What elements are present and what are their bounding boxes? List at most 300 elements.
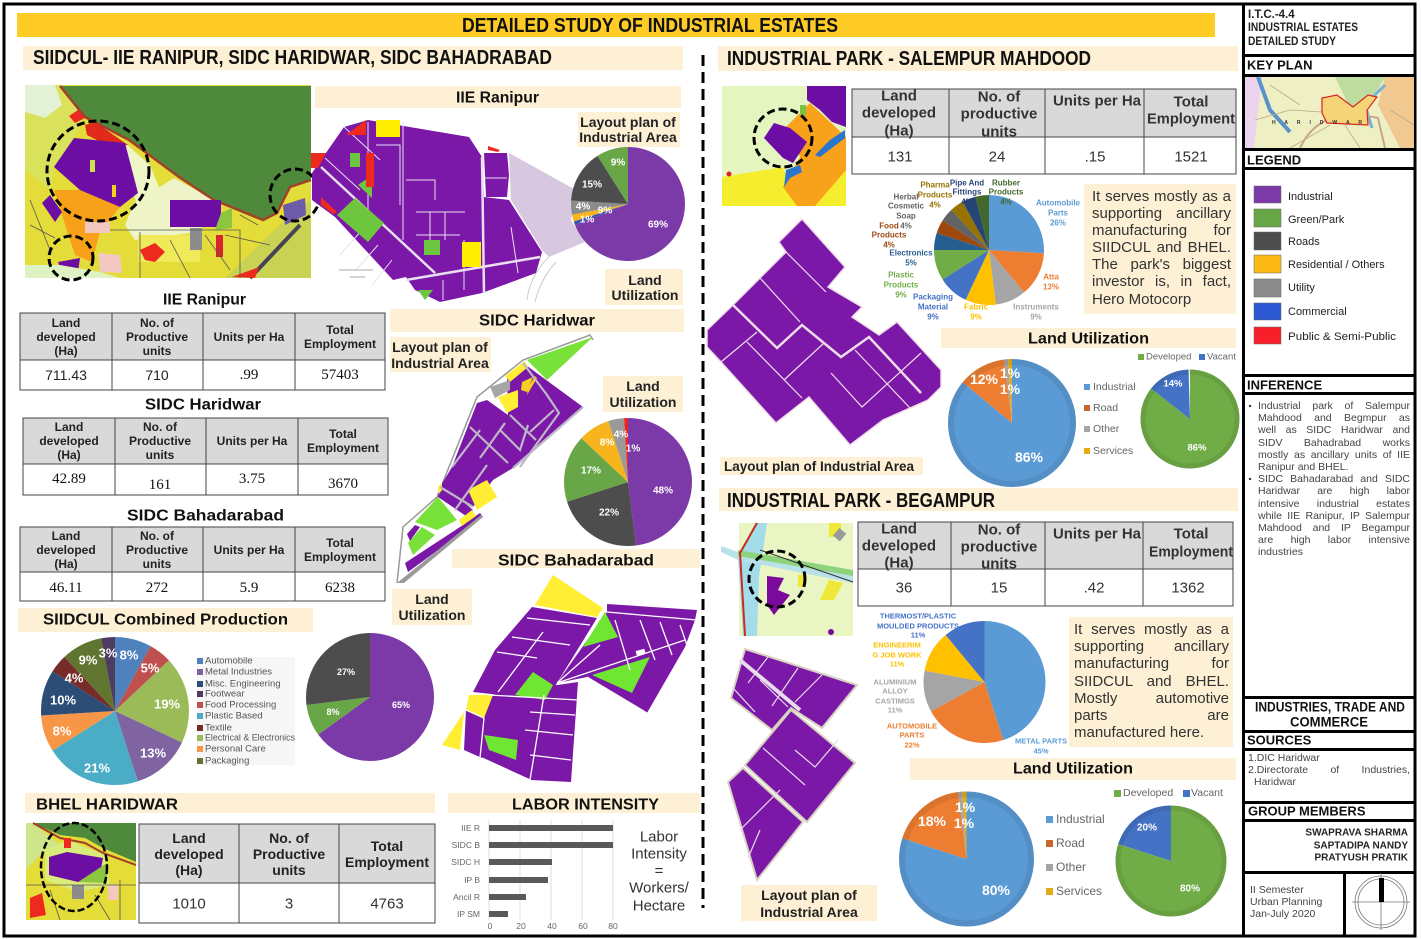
table: Begampur: 36 <box>896 580 912 596</box>
table: SIDC Bahadarabad: developed <box>36 543 96 557</box>
table: Salempur: units <box>981 124 1017 140</box>
table: SIDC Haridwar: 161 <box>149 477 171 493</box>
text: labor intensity formula: Labor <box>640 828 678 846</box>
table: BHEL Haridwar: developed <box>154 846 224 862</box>
text block: inference bullets <box>1258 400 1410 558</box>
map: Salempur <box>722 86 846 206</box>
pie: SIIDCUL combined production: 8% <box>53 724 72 738</box>
pie: Begampur production: ALLOY <box>882 686 908 696</box>
pie: SIIDCUL combined production: 8% <box>120 648 139 662</box>
pie: Salempur production: 9% <box>895 290 907 300</box>
legend: land use: Public & Semi-Public <box>1288 331 1397 343</box>
table: BHEL Haridwar: Land <box>172 830 206 846</box>
map: key plan <box>1245 77 1414 148</box>
legend: combined production: Metal Industries <box>205 666 272 678</box>
pie: Salempur production: Pipe And <box>950 178 984 188</box>
table: BHEL Haridwar: units <box>272 862 306 878</box>
table: IIE Ranipur: units <box>143 344 172 358</box>
text block: Begampur description: It serves mostly as a <box>1074 621 1229 638</box>
table: Salempur: (Ha) <box>884 122 914 140</box>
table: SIDC Bahadarabad <box>20 527 385 601</box>
pie: SIIDCUL combined production: 4% <box>65 670 84 686</box>
table: IIE Ranipur: 711.43 <box>45 367 87 383</box>
pie: Salempur production: Soap <box>896 212 916 220</box>
table: Begampur: developed <box>862 538 936 554</box>
pie: Begampur production <box>872 612 1067 756</box>
pie: Salempur land utilization: 86% <box>1015 449 1044 465</box>
bar chart: labor intensity: 20 <box>516 921 526 931</box>
pie: SIIDCUL combined production <box>50 646 180 776</box>
text block: Begampur description <box>1074 621 1229 741</box>
text block: Begampur description: Mostly automotive <box>1074 690 1229 707</box>
panel: BHEL Haridwar heading: BHEL HARIDWAR <box>36 796 178 814</box>
label: layout plan IIE Ranipur <box>578 112 680 147</box>
table: BHEL Haridwar: 1010 <box>172 896 206 912</box>
label: layout plan SIDC Haridwar: Industrial Area <box>391 355 489 371</box>
table: SIDC Bahadarabad: 5.9 <box>240 580 258 596</box>
pie: Begampur land utilization: 1% <box>955 799 976 815</box>
bar chart: labor intensity: SIDC B <box>452 840 480 850</box>
pie: SIIDCUL combined production: 3% <box>99 646 118 660</box>
legend: Begampur developed vacant: Developed <box>1123 787 1173 799</box>
heading: IIE Ranipur table: IIE Ranipur <box>163 292 246 308</box>
table: Salempur: No. of <box>978 88 1021 106</box>
table: SIDC Bahadarabad: Employment <box>304 550 376 564</box>
legend: Salempur developed vacant <box>1138 352 1236 362</box>
pie: SIDC Haridwar land utilization: 1% <box>626 444 640 454</box>
panel: SIIDCUL heading: SIIDCUL- IIE RANIPUR, SIDC HARIDWAR, SIDC BAHADRABAD <box>33 47 552 69</box>
pie: Begampur production: 11% <box>911 630 926 640</box>
pie: Begampur production: ENGINEERIM <box>873 640 921 650</box>
plan: SIDC Haridwar layout <box>397 335 593 583</box>
table: Salempur: Land <box>881 88 917 104</box>
panel: Labor intensity heading: LABOR INTENSITY <box>512 796 659 814</box>
pie: Salempur production: Products <box>989 188 1024 196</box>
table: BHEL Haridwar: (Ha) <box>175 862 203 878</box>
pie: Begampur production: 22% <box>904 740 920 750</box>
table: BHEL Haridwar: Total <box>371 838 403 854</box>
legend: Salempur land utilization <box>1084 381 1136 457</box>
table: SIDC Bahadarabad: units <box>143 557 172 571</box>
text block: Begampur description: SIIDCUL and BHEL. <box>1074 673 1229 690</box>
text block: Begampur description: manufactured here. <box>1074 724 1204 741</box>
label: land utilization IIE Ranipur <box>605 269 683 305</box>
table: SIDC Haridwar: (Ha) <box>57 448 81 462</box>
table: Begampur: Units per Ha <box>1053 526 1142 542</box>
table: Salempur: 24 <box>989 148 1005 166</box>
pie: Salempur production: 4% <box>929 200 941 210</box>
text block: Salempur description: The park's biggest <box>1092 256 1231 273</box>
bar chart: labor intensity: IP B <box>464 875 480 885</box>
pie: SIIDCUL combined production: 9% <box>79 652 98 668</box>
pie: Salempur production: Packaging <box>913 292 953 302</box>
text block: inference bullets: SIDC Bahadarabad and SIDC <box>1258 473 1410 485</box>
table: SIDC Haridwar <box>23 418 388 495</box>
table: SIDC Bahadarabad: 46.11 <box>49 580 83 596</box>
text block: sources list <box>1248 752 1410 788</box>
text block: Salempur description: investor is, in fact, <box>1092 273 1231 290</box>
table: SIDC Bahadarabad: (Ha) <box>54 557 78 571</box>
heading: SIDC Bahadarabad table: SIDC Bahadarabad <box>127 508 284 524</box>
label: land utilization SIDC Haridwar <box>603 376 683 412</box>
pie: Salempur production: 9% <box>970 312 982 322</box>
pie: Salempur developed vs vacant: 14% <box>1163 378 1183 390</box>
table: SIDC Bahadarabad: Total <box>326 536 354 550</box>
table: SIDC Haridwar: 3.75 <box>239 471 265 487</box>
table: BHEL Haridwar: 4763 <box>370 896 404 912</box>
title banner: DETAILED STUDY OF INDUSTRIAL ESTATES <box>462 15 838 37</box>
table: BHEL Haridwar: Employment <box>345 854 429 870</box>
table: Salempur: Employment <box>1147 110 1235 128</box>
table: IIE Ranipur: Land <box>52 316 80 330</box>
sidebar: group member names: SWAPRAVA SHARMA <box>1305 828 1408 838</box>
legend: combined production: Textile <box>205 722 232 734</box>
pie: Begampur production: ALUMINIUM <box>874 678 916 686</box>
table: Begampur: (Ha) <box>884 554 914 572</box>
pie: Begampur production: G JOB WORK <box>872 650 922 660</box>
table: Salempur: productive <box>961 106 1037 122</box>
sidebar: sources heading: SOURCES <box>1247 732 1312 748</box>
text: labor intensity formula: Workers/ <box>629 880 690 896</box>
label: Begampur layout plan: Layout plan of <box>761 887 857 903</box>
text block: Begampur description: parts are <box>1074 707 1229 724</box>
text block: inference bullets: industries <box>1258 546 1303 558</box>
text block: Salempur description: Hero Motocorp <box>1092 291 1191 308</box>
pie: Salempur production: Plastic <box>888 270 914 280</box>
panel: Begampur land utilization heading: Land Utilization <box>1013 760 1133 778</box>
pie: Begampur land utilization: 80% <box>982 882 1011 898</box>
pie: Begampur developed vs vacant: 80% <box>1180 884 1200 894</box>
plan: SIDC Bahadarabad layout <box>442 575 697 782</box>
bar chart: labor intensity: 40 <box>547 921 557 931</box>
legend: Begampur land utilization: Industrial <box>1056 812 1105 826</box>
pie: Begampur production: CASTIMGS <box>875 696 915 706</box>
panel: SIDC Haridwar heading: SIDC Haridwar <box>479 312 595 330</box>
table: SIDC Haridwar: Land <box>55 420 83 434</box>
bar chart: labor intensity: 0 <box>488 921 493 931</box>
legend: Begampur developed vacant: Vacant <box>1191 787 1223 799</box>
pie: Salempur land utilization: 1% <box>1000 365 1021 381</box>
text block: inference bullets: Mahdood and IP Begampur <box>1258 522 1410 534</box>
pie: Begampur production: 11% <box>890 660 905 668</box>
pie: SIIDCUL combined production: 21% <box>84 760 110 776</box>
table: Begampur: .42 <box>1084 580 1104 596</box>
panel: SIDC Bahadarabad heading: SIDC Bahadarabad <box>498 552 654 570</box>
map: Begampur <box>721 523 853 636</box>
pie: IIE Ranipur land utilization: 69% <box>648 220 668 230</box>
table: Begampur: Total <box>1174 526 1208 542</box>
pie: IIE Ranipur land utilization: 9% <box>611 158 625 168</box>
map: regional land use with estates circled <box>25 85 320 280</box>
pie: SIIDCUL combined production: 5% <box>141 660 160 676</box>
label: layout plan SIDC Haridwar: Layout plan of <box>392 339 488 355</box>
legend: combined production: Food Processing <box>205 700 276 710</box>
pie: Begampur production: 11% <box>888 706 903 714</box>
legend: land use <box>1254 186 1397 344</box>
pie: SIDC Haridwar land utilization: 22% <box>599 508 619 518</box>
sidebar: sheet title: DETAILED STUDY <box>1248 36 1336 48</box>
pie: Salempur production: 13% <box>1043 282 1059 292</box>
map: BHEL Haridwar <box>26 823 136 920</box>
table: Salempur <box>852 88 1236 174</box>
table: Salempur: .15 <box>1085 148 1105 166</box>
panel: IIE Ranipur heading: IIE Ranipur <box>456 90 539 106</box>
icon: north arrow <box>1352 873 1410 930</box>
legend: Begampur land utilization: Road <box>1056 836 1085 850</box>
label: layout plan IIE Ranipur: Industrial Area <box>579 129 677 145</box>
bar chart: labor intensity: 80 <box>608 921 618 931</box>
sidebar: group member names: PRATYUSH PRATIK <box>1314 852 1409 864</box>
legend: Begampur developed vacant <box>1114 787 1223 799</box>
sidebar: semester note: Jan-July 2020 <box>1250 908 1316 920</box>
table: BHEL Haridwar: 3 <box>285 896 293 912</box>
bar chart: labor intensity: Ancil R <box>453 892 480 902</box>
text block: inference bullets: Mahdood and Begmpur as <box>1258 412 1410 424</box>
title banner <box>17 13 1215 37</box>
legend: land use: Residential / Others <box>1288 259 1385 271</box>
table: Salempur: 131 <box>887 148 913 166</box>
text block: Salempur description: manufacturing for <box>1092 222 1231 239</box>
text block: inference bullets: while IIE Ranipur, IP Salempur <box>1258 510 1410 522</box>
pie: SIDC Bahadarabad land utilization: 27% <box>337 667 355 677</box>
pie: Begampur production: 45% <box>1033 746 1049 756</box>
table: Begampur: units <box>981 556 1017 572</box>
legend: combined production: Personal Care <box>205 744 266 754</box>
legend: Salempur developed vacant: Vacant <box>1207 352 1236 362</box>
panel: Begampur heading <box>719 488 1238 512</box>
table: SIDC Haridwar: units <box>146 448 175 462</box>
pie: Begampur production: THERMOST/PLASTIC <box>880 612 957 620</box>
label: Salempur layout plan: Layout plan of Industrial Area <box>724 458 914 474</box>
table: IIE Ranipur: Productive <box>126 330 188 344</box>
legend: land use: Green/Park <box>1288 214 1345 226</box>
pie: SIIDCUL combined production: 13% <box>140 746 166 760</box>
bar chart: labor intensity: IP SM <box>457 909 480 919</box>
pie: Salempur land utilization <box>951 362 1073 484</box>
pie: Salempur developed vs vacant <box>1143 372 1237 466</box>
legend: combined production: Electrical & Electronics <box>205 732 295 744</box>
pie: Salempur production: 9% <box>927 312 939 322</box>
pie: Salempur production: Electronics <box>889 248 933 258</box>
legend: combined production: Plastic Based <box>205 710 263 722</box>
pie: IIE Ranipur land utilization <box>576 158 668 232</box>
label: land utilization SIDC Bahadarabad: Utilization <box>399 607 465 623</box>
pie: Salempur production: Parts <box>1048 208 1069 218</box>
pie: Salempur production: Automobile <box>1036 198 1081 208</box>
sidebar: group member names <box>1305 828 1409 864</box>
text block: Salempur description: supporting ancillary <box>1092 205 1231 222</box>
pie: Begampur production: METAL PARTS <box>1015 736 1067 746</box>
table: SIDC Haridwar: Total <box>329 427 357 441</box>
plan: Salempur layout <box>707 219 941 445</box>
pie: Salempur production: Food <box>879 222 899 230</box>
pie: SIDC Haridwar land utilization: 17% <box>581 466 601 476</box>
table: IIE Ranipur: .99 <box>240 367 258 383</box>
pie: Salempur production: Instruments <box>1013 302 1059 312</box>
label: land utilization SIDC Haridwar: Utilization <box>610 394 676 410</box>
bar chart: labor intensity: SIDC H <box>451 857 480 867</box>
text block: Begampur description: manufacturing for <box>1074 655 1229 672</box>
sidebar: sheet title <box>1248 9 1358 48</box>
pie: Salempur production: 26% <box>1050 218 1066 228</box>
pie: Salempur production: 9% <box>1030 312 1042 322</box>
table: SIDC Haridwar: Employment <box>307 441 379 455</box>
table: IIE Ranipur <box>20 313 385 390</box>
text block: inference bullets: well as SIDC Haridwar and <box>1258 424 1410 436</box>
legend: combined production: Automobile <box>205 656 253 666</box>
panel: Salempur land utilization heading <box>941 328 1236 348</box>
legend: Begampur land utilization <box>1046 812 1105 898</box>
panel: Labor intensity heading <box>448 793 700 814</box>
pie: Begampur land utilization: 1% <box>954 815 975 831</box>
legend: Salempur land utilization: Road <box>1093 402 1118 414</box>
pie: Salempur production <box>872 178 1081 322</box>
label: land utilization IIE Ranipur: Land <box>628 272 662 288</box>
label: layout plan IIE Ranipur: Layout plan of <box>580 114 676 130</box>
pie: SIDC Bahadarabad land utilization: 65% <box>392 700 410 710</box>
table: SIDC Bahadarabad: Productive <box>126 543 188 557</box>
legend: combined production: Misc. Engineering <box>205 678 281 690</box>
sidebar: sheet title: I.T.C.-4.4 <box>1248 9 1295 21</box>
sidebar: legend heading: LEGEND <box>1247 152 1301 168</box>
pie: Salempur production: Atta <box>1043 272 1059 282</box>
pie: IIE Ranipur land utilization: 1% <box>580 214 594 226</box>
legend: land use: Commercial <box>1288 306 1347 318</box>
pie: SIDC Haridwar land utilization: 4% <box>614 430 628 440</box>
legend: Begampur land utilization: Other <box>1056 860 1086 874</box>
label: land utilization SIDC Bahadarabad: Land <box>415 591 449 607</box>
table: Begampur: 15 <box>991 580 1007 596</box>
pie: SIIDCUL combined production: 10% <box>50 692 76 708</box>
table: SIDC Bahadarabad: No. of <box>140 529 175 543</box>
sidebar: industries heading: INDUSTRIES, TRADE AND <box>1255 700 1405 714</box>
sidebar: industries heading <box>1255 700 1405 730</box>
legend: Salempur land utilization: Industrial <box>1093 381 1136 393</box>
panel: IIE Ranipur heading <box>315 86 681 108</box>
heading: SIDC Haridwar table: SIDC Haridwar <box>145 396 261 414</box>
bar chart: labor intensity: IIE R <box>461 823 480 833</box>
table: SIDC Haridwar: 42.89 <box>52 471 86 487</box>
sidebar: key plan heading: KEY PLAN <box>1247 58 1312 72</box>
pie: Salempur land utilization: 1% <box>1000 381 1021 397</box>
legend: Salempur land utilization: Services <box>1093 445 1133 457</box>
pie: Salempur production: Fabric <box>964 302 989 312</box>
panel: Salempur land utilization heading: Land Utilization <box>1028 330 1149 348</box>
text block: inference bullets: mostly as ancillary units of IIE <box>1258 449 1410 461</box>
table: IIE Ranipur: (Ha) <box>54 344 78 358</box>
pie: Begampur developed vs vacant <box>1118 808 1224 914</box>
text block: inference bullets: intensive industrial estates <box>1258 498 1410 510</box>
legend: Salempur developed vacant: Developed <box>1146 352 1191 362</box>
sidebar: semester note: II Semester <box>1250 884 1304 896</box>
pie: Salempur production: Herbal <box>894 192 918 202</box>
pie: Salempur land utilization: 12% <box>970 371 999 387</box>
sidebar: industries heading: COMMERCE <box>1290 714 1368 730</box>
pie: Begampur production: MOULDED PRODUCTS <box>877 622 959 630</box>
text block: inference bullets: Industrial park of Salempur <box>1258 400 1410 412</box>
text block: sources list: 2.Directorate of Industries, <box>1248 764 1410 776</box>
legend: combined production <box>197 656 295 766</box>
text block: Salempur description <box>1092 188 1231 308</box>
legend: Salempur land utilization: Other <box>1093 423 1120 435</box>
text box background: Salempur <box>1084 184 1236 314</box>
label: Begampur layout plan <box>741 885 877 921</box>
pie: SIDC Bahadarabad land utilization <box>326 665 410 729</box>
table: BHEL Haridwar: Productive <box>253 846 325 862</box>
pie: Salempur production: Cosmetic <box>888 202 925 210</box>
table: BHEL Haridwar <box>139 824 435 923</box>
text: labor intensity formula: Hectare <box>633 898 685 914</box>
pie: Salempur developed vs vacant: 86% <box>1187 442 1207 454</box>
table: SIDC Haridwar: Units per Ha <box>217 434 288 448</box>
text block: Salempur description: It serves mostly as a <box>1092 188 1231 205</box>
sidebar: sheet title: INDUSTRIAL ESTATES <box>1248 22 1358 34</box>
text block: inference bullets: Ranipur and BHEL. <box>1258 461 1348 473</box>
table: BHEL Haridwar: No. of <box>269 830 309 846</box>
legend: land use: Utility <box>1288 282 1315 294</box>
table: IIE Ranipur: 710 <box>145 367 169 383</box>
bar chart: labor intensity: 60 <box>578 921 588 931</box>
text block: inference bullets: are high labor intensive <box>1258 534 1410 546</box>
label: land utilization SIDC Bahadarabad <box>392 589 472 625</box>
legend: combined production: Footwear <box>205 688 245 700</box>
legend: Begampur land utilization: Services <box>1056 884 1102 898</box>
table: SIDC Bahadarabad: Units per Ha <box>214 543 285 557</box>
pie: Begampur production: AUTOMOBILE <box>887 722 937 730</box>
pie: SIDC Haridwar land utilization: 8% <box>600 438 614 448</box>
text: labor intensity formula: = <box>655 862 664 880</box>
sidebar: group members heading: GROUP MEMBERS <box>1248 804 1366 818</box>
pie: Begampur developed vs vacant: 20% <box>1137 822 1157 834</box>
sidebar: semester note <box>1250 884 1323 920</box>
pie: Salempur production: 4% <box>900 222 912 230</box>
map: key plan: H A R I D W A R <box>1272 120 1362 126</box>
pie: Salempur production: 5% <box>905 258 917 268</box>
table: IIE Ranipur: Employment <box>304 337 376 351</box>
label: land utilization SIDC Haridwar: Land <box>626 378 660 394</box>
pie: Salempur production: Products <box>884 280 919 290</box>
panel: SIDC Bahadarabad heading <box>452 549 700 570</box>
text block: Begampur description: supporting ancillary <box>1074 638 1229 655</box>
text block: sources list: Haridwar <box>1254 776 1296 788</box>
table: SIDC Bahadarabad: Land <box>52 529 80 543</box>
label: land utilization IIE Ranipur: Utilization <box>612 287 678 303</box>
pie: SIDC Bahadarabad land utilization: 8% <box>326 707 340 717</box>
text block: inference bullets: Haridwar are high labor <box>1258 485 1410 497</box>
pie: Begampur land utilization <box>902 794 1031 924</box>
table: Salempur: developed <box>862 104 936 122</box>
pie: SIDC Haridwar land utilization <box>581 430 673 518</box>
pie: Salempur production: Products <box>872 230 907 240</box>
text: labor intensity formula <box>629 828 690 914</box>
pie: Salempur production: Pharma <box>920 180 950 190</box>
table: Begampur: 1362 <box>1171 580 1205 596</box>
text block: Salempur description: SIIDCUL and BHEL. <box>1092 239 1231 256</box>
pie: Salempur production: Fittings <box>953 188 982 196</box>
column divider <box>702 55 704 908</box>
pie: Begampur land utilization: 18% <box>918 813 947 829</box>
pie: IIE Ranipur land utilization: 15% <box>582 180 602 190</box>
text block: sources list: 1.DIC Haridwar <box>1248 752 1320 764</box>
table: Salempur: 1521 <box>1174 148 1208 166</box>
legend: land use: Roads <box>1288 236 1320 248</box>
table: SIDC Haridwar: No. of <box>143 420 178 434</box>
plan: IIE Ranipur layout <box>311 120 585 302</box>
table: IIE Ranipur: Total <box>326 323 354 337</box>
table: SIDC Haridwar: developed <box>39 434 99 448</box>
sidebar: group member names: SAPTADIPA NANDY <box>1314 840 1408 852</box>
panel: BHEL Haridwar heading <box>25 793 435 814</box>
